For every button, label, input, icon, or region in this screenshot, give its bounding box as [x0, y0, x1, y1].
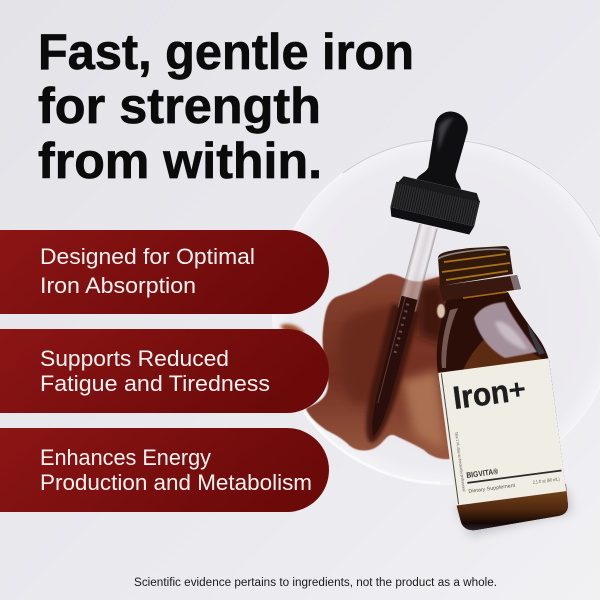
footnote: Scientific evidence pertains to ingredients, not the product as a whole. — [134, 577, 497, 589]
rubber bulb — [416, 107, 478, 189]
brand name: Iron — [451, 373, 511, 416]
dark right band — [527, 322, 545, 355]
neck threads — [438, 246, 513, 286]
title: Fast, gentle iron — [38, 24, 414, 80]
label subtitle: Dietary Supplement — [468, 483, 516, 495]
benefit pill: absorption — [0, 230, 329, 314]
title: from within. — [38, 133, 322, 189]
side edge line — [441, 373, 459, 504]
dropper pipette — [357, 222, 442, 446]
glass tube — [398, 224, 438, 312]
shoulder highlight — [474, 302, 537, 358]
dropper cap and rubber bulb — [388, 103, 498, 235]
title — [38, 24, 414, 189]
benefit pill: fatigue — [0, 329, 329, 413]
tip halo — [357, 304, 420, 446]
glass reflection — [378, 297, 405, 403]
benefit pill: fatigue: Supports Reduced — [40, 346, 229, 371]
benefit pill: absorption: Designed for Optimal — [40, 244, 255, 269]
lower body amber — [462, 330, 544, 372]
filled lower tube — [366, 296, 418, 438]
label rule — [467, 470, 562, 484]
bulb highlight — [433, 115, 454, 153]
bottom glass — [456, 484, 568, 530]
side small print: Take 1 mL daily as directed by professional — [454, 432, 466, 492]
benefit pill: fatigue: Fatigue and Tiredness — [40, 371, 270, 396]
bottle shadow — [456, 488, 572, 536]
benefit pill: energy — [0, 428, 329, 512]
amber bottle — [437, 246, 572, 536]
thread lines — [442, 254, 510, 280]
collar amber line — [463, 292, 507, 298]
shoulder highlight core — [495, 321, 528, 350]
ribbed cap — [390, 182, 480, 226]
brand plus — [509, 382, 525, 398]
title: for strength — [38, 78, 321, 134]
left edge highlight — [441, 308, 458, 368]
glass body — [437, 292, 568, 530]
iron liquid spill — [280, 274, 454, 459]
benefit pill: energy: Enhances Energy — [40, 445, 212, 470]
thread rim — [438, 249, 509, 259]
glass dish — [273, 140, 600, 484]
benefit pill: energy: Production and Metabolism — [40, 470, 312, 495]
collar edge — [510, 275, 521, 290]
product label — [438, 358, 566, 506]
label brand: BIGVITA® — [466, 467, 499, 480]
label volume: 2.1 fl oz (60 mL) — [533, 476, 560, 485]
cap top rim — [396, 175, 482, 202]
benefit pill: absorption: Iron Absorption — [40, 273, 196, 298]
cap lower rim — [388, 207, 474, 235]
collar — [439, 275, 521, 301]
droplet highlight — [437, 304, 445, 318]
bubbles — [394, 304, 408, 356]
